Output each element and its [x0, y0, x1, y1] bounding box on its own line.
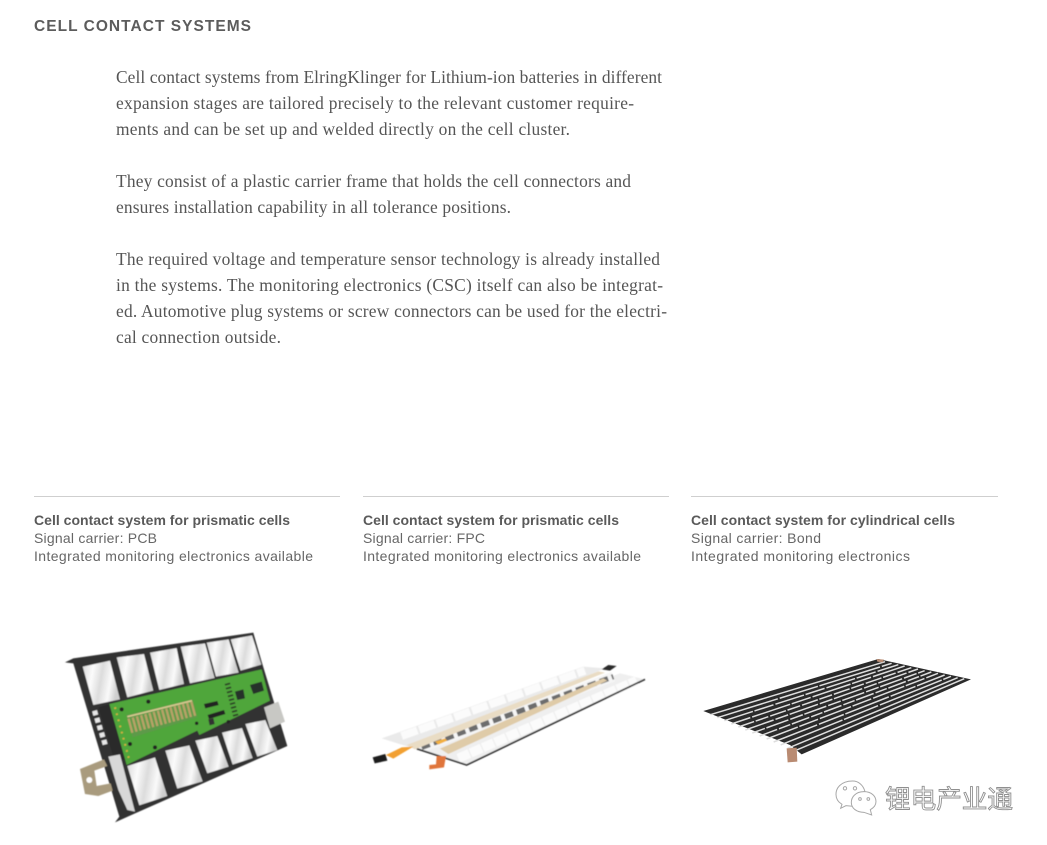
copper tab top [877, 659, 884, 662]
connector slots [92, 710, 108, 745]
copper tab [429, 756, 446, 769]
paragraph 1: Cell contact systems from ElringKlinger for Lithium-ion batteries in different [116, 67, 662, 87]
title: CELL CONTACT SYSTEMS [34, 18, 251, 35]
lower cell row [458, 681, 637, 758]
paragraph 3: in the systems. The monitoring electronics (CSC) itself can also be integrat- [116, 275, 663, 295]
column 2 caption: prismatic FPC: Signal carrier: FPC [363, 530, 485, 546]
plug top right [602, 665, 617, 671]
column 2 caption: prismatic FPC [363, 496, 669, 564]
paragraph 2 [116, 171, 631, 217]
lower row of aluminium cell connectors [127, 720, 277, 805]
column 3 caption: cylindrical bond [691, 496, 998, 564]
copper terminal [787, 748, 797, 762]
paragraph 1: expansion stages are tailored precisely to the relevant customer require- [116, 93, 634, 113]
paragraph 2: They consist of a plastic carrier frame that holds the cell connectors and [116, 171, 631, 191]
text block: introduction [116, 67, 667, 347]
column 1 caption: prismatic PCB [34, 496, 340, 564]
paragraph 1 [116, 67, 662, 139]
orange flex and plug left [386, 747, 413, 759]
carrier base [417, 673, 645, 765]
carrier plate [703, 659, 971, 754]
paragraph 3: The required voltage and temperature sensor technology is already installed [116, 249, 660, 269]
paragraph 3: ed. Automotive plug systems or screw connectors can be used for the electri- [116, 301, 667, 321]
product image: FPC cell contact system [373, 665, 645, 769]
board components [115, 682, 264, 760]
paragraph 3 [116, 249, 667, 347]
column 1 caption: prismatic PCB: Cell contact system for prismatic cells [34, 512, 290, 528]
cover cells [402, 671, 585, 736]
column 1 caption: prismatic PCB: Signal carrier: PCB [34, 530, 157, 546]
column 3 caption: cylindrical bond: Signal carrier: Bond [691, 530, 821, 546]
metal terminals [80, 702, 285, 812]
upper row of aluminium cell connectors [83, 635, 261, 705]
carrier frame [65, 633, 287, 822]
dark lower edge [417, 679, 645, 765]
watermark: account name: 锂电产业通 [885, 785, 1013, 814]
column 3 caption: cylindrical bond: Integrated monitoring electronics [691, 548, 910, 564]
column 1 caption: prismatic PCB: Integrated monitoring electronics available [34, 548, 313, 564]
column 2 caption: prismatic FPC: Integrated monitoring electronics available [363, 548, 641, 564]
signal flex strips [407, 671, 605, 749]
paragraph 3: cal connection outside. [116, 327, 281, 347]
paragraph 2: ensures installation capability in all tolerance positions. [116, 197, 511, 217]
connector row [422, 677, 613, 747]
translucent cover [382, 667, 605, 748]
green circuit board [109, 669, 270, 765]
watermark: WeChat icon [836, 781, 876, 815]
product image: PCB cell contact system [65, 633, 287, 822]
bond traces [710, 662, 964, 750]
column 2 caption: prismatic FPC: Cell contact system for prismatic cells [363, 512, 619, 528]
column 3 caption: cylindrical bond: Cell contact system for cylindrical cells [691, 512, 955, 528]
product image: bonded cylindrical cell contact system [703, 659, 971, 762]
paragraph 1: ments and can be set up and welded directly on the cell cluster. [116, 119, 570, 139]
black plate under board [98, 703, 130, 762]
